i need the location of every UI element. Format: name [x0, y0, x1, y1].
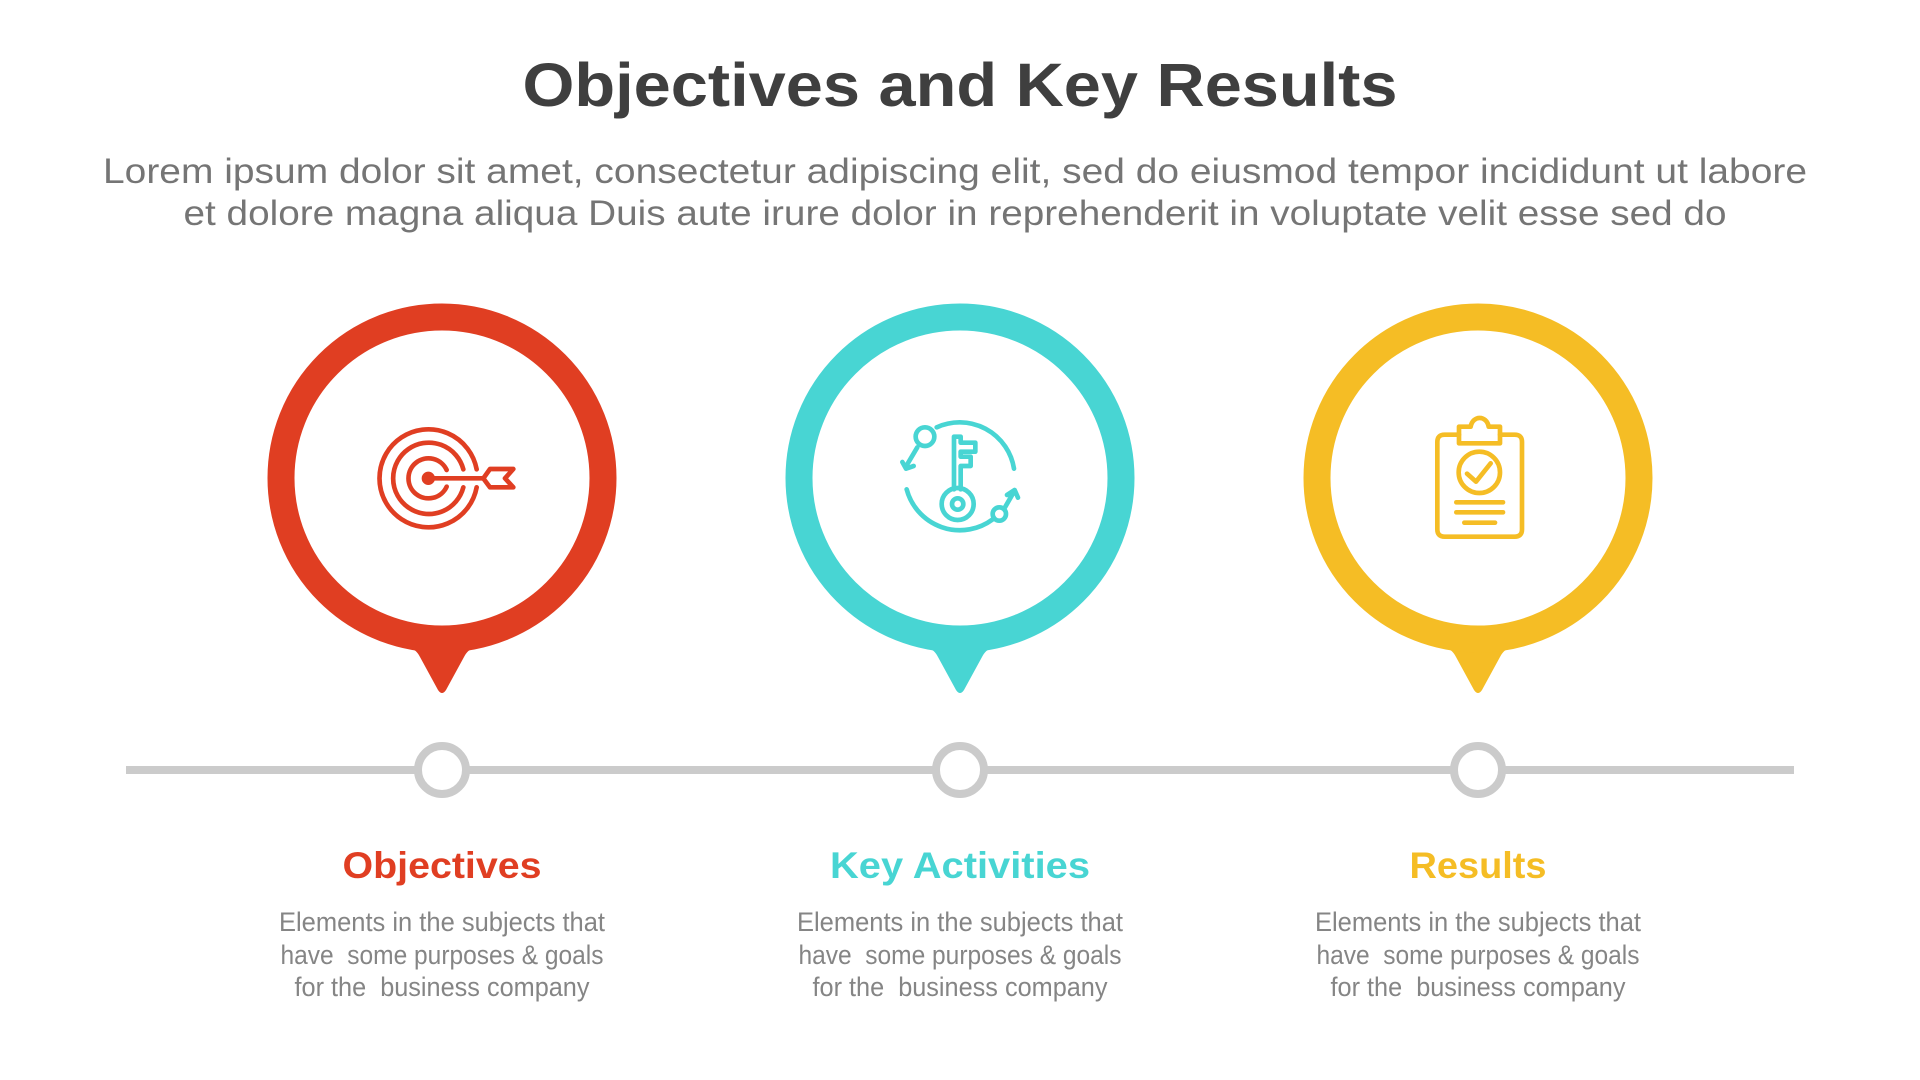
- text block: objectives: [279, 845, 605, 1002]
- panel: objectives pin: [281, 317, 603, 693]
- heading: results: Results: [1410, 845, 1546, 886]
- icon: clipboard with check: [1437, 418, 1522, 537]
- panel: results pin: [1317, 317, 1639, 693]
- panel: key activities pin: [799, 317, 1121, 693]
- title: Objectives and Key Results: [522, 51, 1398, 119]
- timeline node 3: [1454, 746, 1502, 794]
- subtitle text: Lorem ipsum dolor sit amet, consectetur adipiscing elit, sed do eiusmod tempor incididunt ut labore: [103, 152, 1807, 191]
- subtitle text: [103, 152, 1807, 233]
- timeline: [126, 746, 1794, 794]
- description: results: have some purposes & goals: [1316, 940, 1640, 970]
- icon: key with cycle arrows: [902, 422, 1018, 530]
- subtitle text: et dolore magna aliqua Duis aute irure dolor in reprehenderit in voluptate velit esse sed do: [184, 194, 1726, 233]
- timeline node 1: [418, 746, 466, 794]
- text block: results: [1315, 845, 1641, 1002]
- description: results: [1315, 907, 1641, 1002]
- text block: key activities: [797, 845, 1123, 1002]
- description: key activities: Elements in the subjects that: [797, 907, 1123, 937]
- timeline node 2: [936, 746, 984, 794]
- heading: objectives: Objectives: [342, 845, 542, 886]
- icon: target with arrow: [379, 429, 513, 527]
- description: key activities: [797, 907, 1123, 1002]
- description: results: for the business company: [1330, 972, 1626, 1002]
- description: results: Elements in the subjects that: [1315, 907, 1641, 937]
- description: objectives: for the business company: [294, 972, 590, 1002]
- description: key activities: for the business company: [812, 972, 1108, 1002]
- description: objectives: [279, 907, 605, 1002]
- description: objectives: have some purposes & goals: [280, 940, 604, 970]
- description: objectives: Elements in the subjects that: [279, 907, 605, 937]
- description: key activities: have some purposes & goals: [798, 940, 1122, 970]
- heading: key activities: Key Activities: [830, 845, 1090, 886]
